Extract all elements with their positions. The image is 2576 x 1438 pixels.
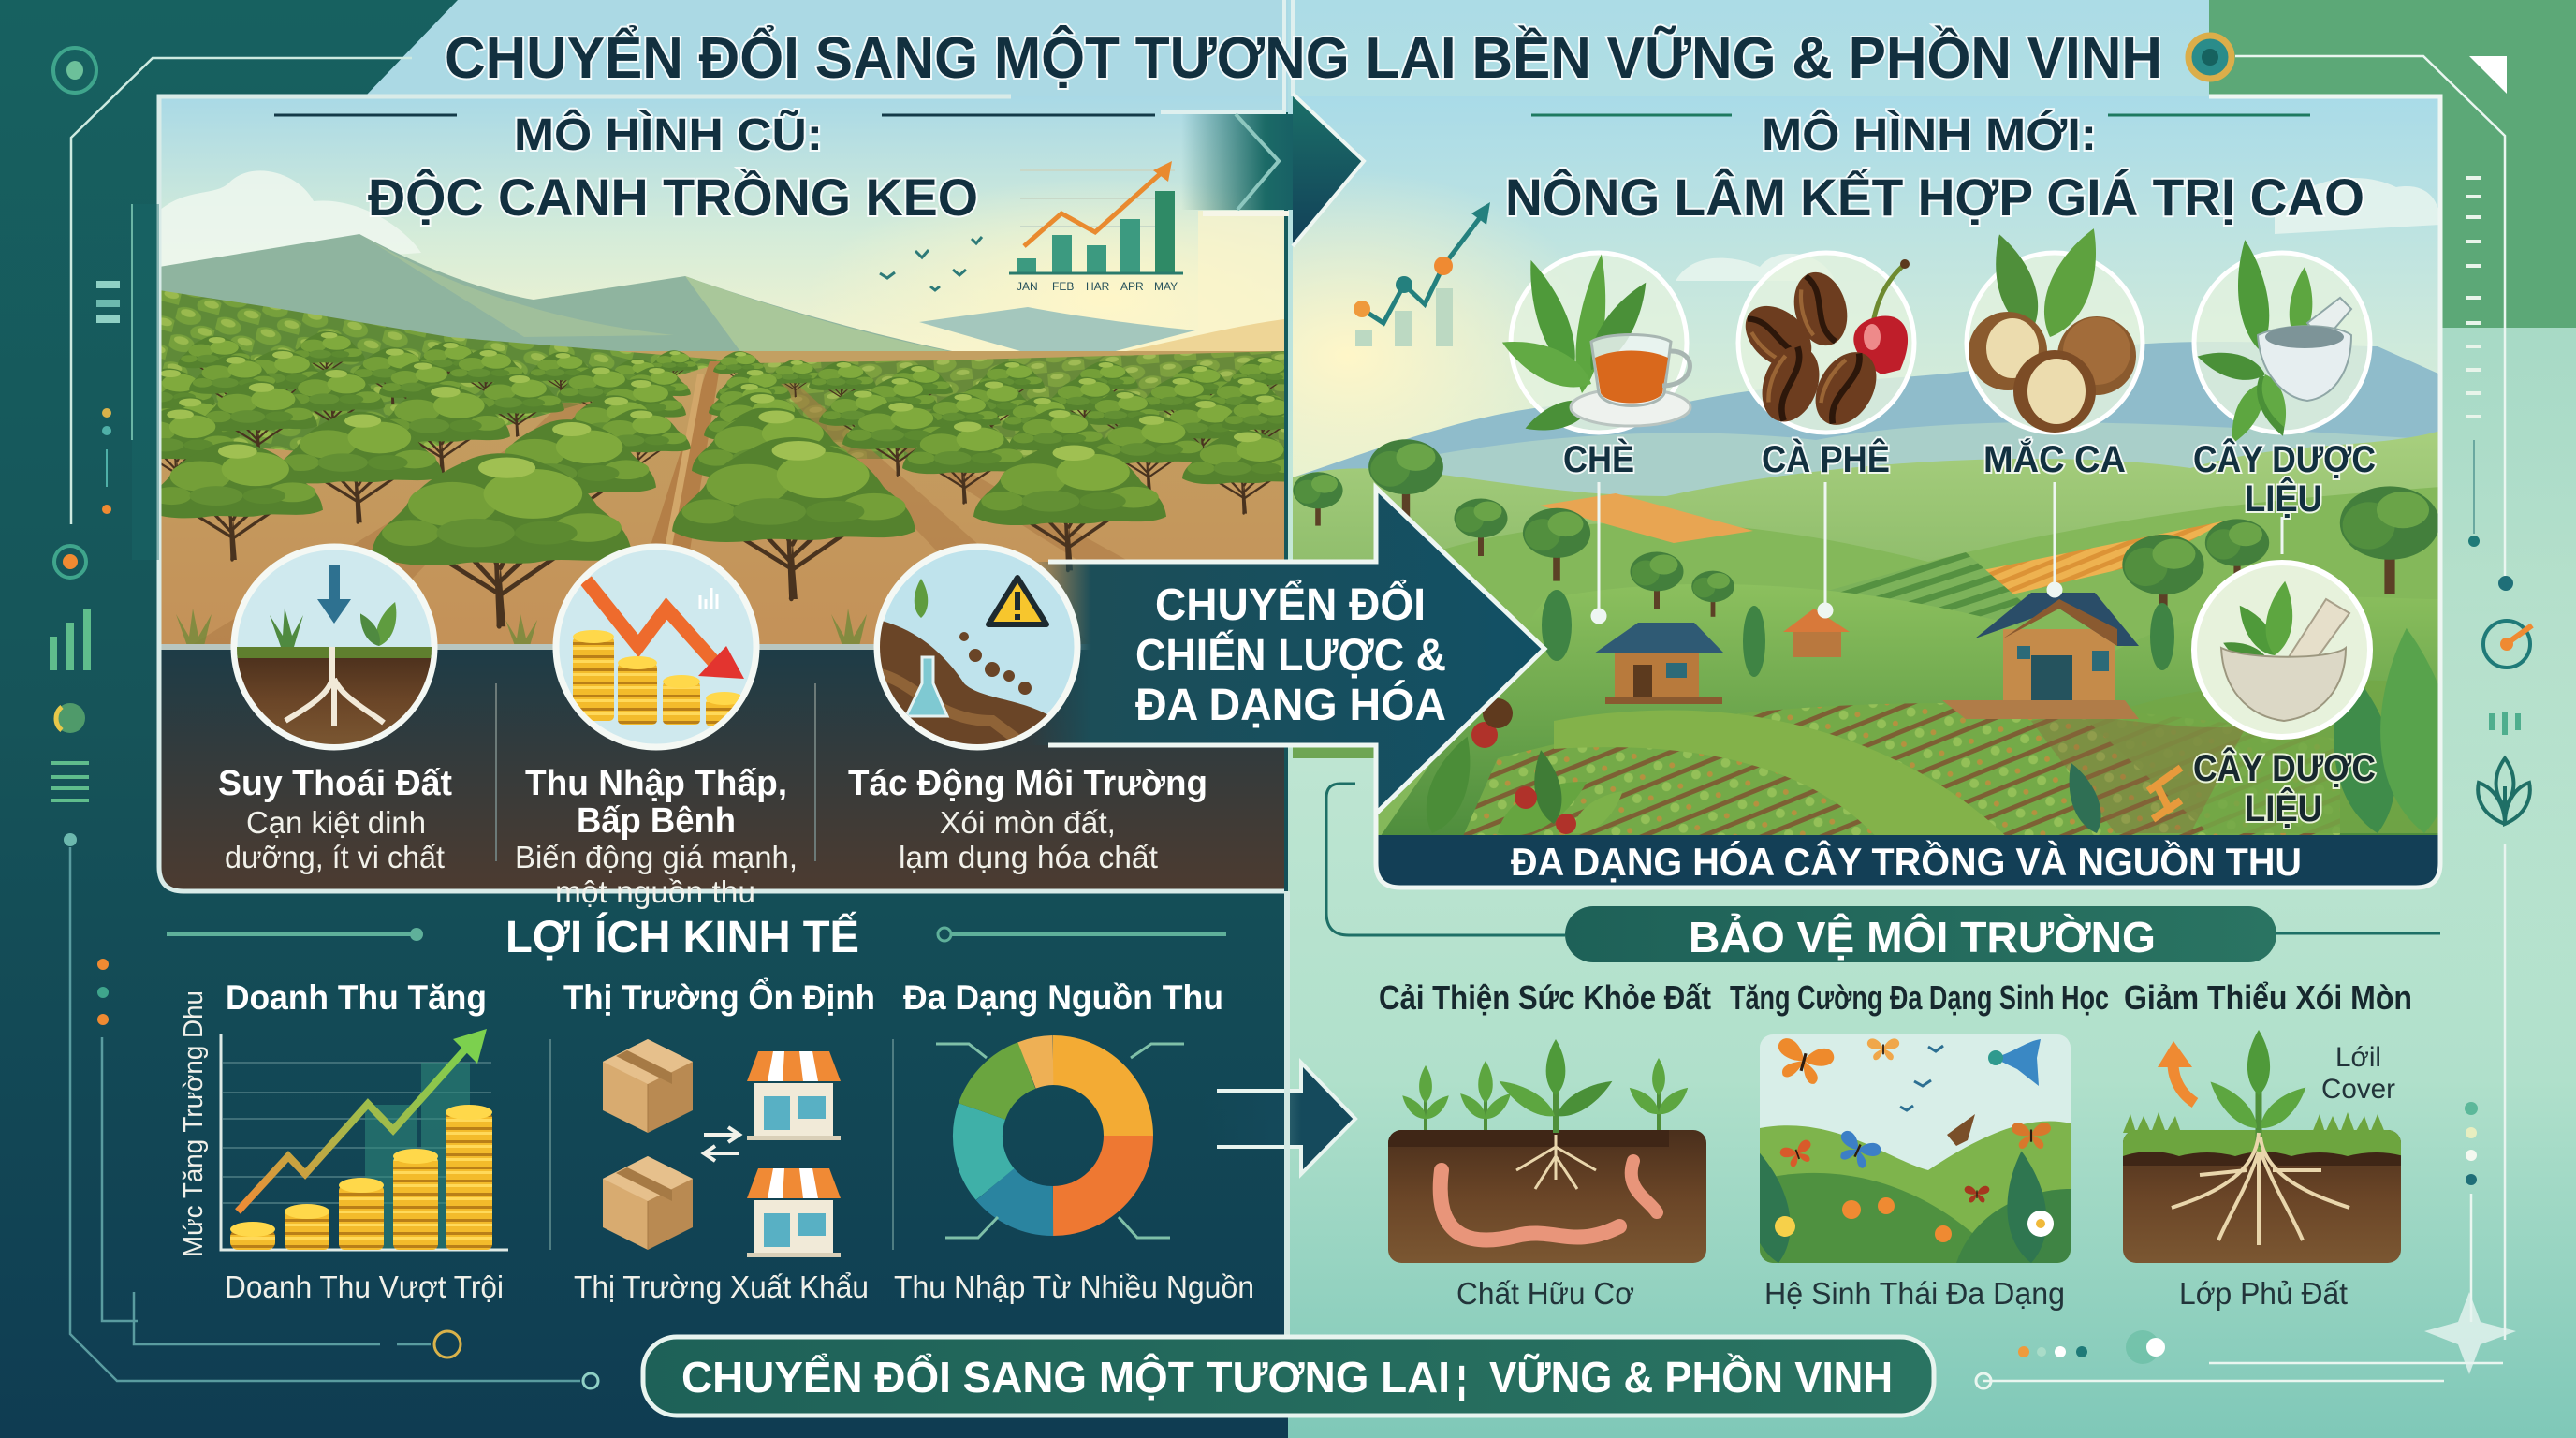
text block: soil degradation: Suy Thoái Đất bbox=[218, 764, 452, 803]
subheadings: benefits: Doanh Thu Tăng bbox=[226, 978, 487, 1017]
pill: closing message: VỮNG & PHỒN VINH bbox=[1489, 1353, 1893, 1401]
banner: diversify crops: ĐA DẠNG HÓA CÂY TRỒNG VÀ NGUỒN THU bbox=[1511, 839, 2302, 884]
crop labels: MẮC CA bbox=[1983, 437, 2126, 480]
birds bbox=[880, 237, 982, 290]
crop label: medicinal herbs repeat: LIỆU bbox=[2245, 786, 2322, 829]
tree rows bbox=[117, 331, 1308, 626]
chart: revenue growth with coins bbox=[179, 990, 508, 1257]
bar chart: monthly growth: JAN bbox=[1017, 280, 1038, 293]
landscape trees bbox=[1293, 439, 2439, 677]
callout lines bbox=[1592, 482, 2282, 623]
pill: closing message: ¦ bbox=[1456, 1359, 1467, 1401]
text block: soil degradation: dưỡng, ít vi chất bbox=[225, 840, 445, 874]
arrow: top transition arrow bbox=[1181, 94, 1364, 246]
caption: market: Thị Trường Xuất Khẩu bbox=[574, 1269, 869, 1304]
arrow label: CHIẾN LƯỢC & bbox=[1135, 630, 1446, 681]
heading: economic benefits: LỢI ÍCH KINH TẾ bbox=[505, 912, 859, 962]
background: left dark half bbox=[0, 0, 1288, 1438]
donut chart: income sources bbox=[936, 1044, 1184, 1238]
icon: soil degradation bbox=[234, 547, 440, 747]
arrow label bbox=[1135, 579, 1446, 730]
icon: falling income bbox=[556, 547, 756, 747]
subheadings: environment: Giảm Thiểu Xói Mòn bbox=[2124, 978, 2412, 1017]
crop labels: CHÈ bbox=[1563, 438, 1634, 480]
decor: title band lower edge bbox=[1161, 0, 1293, 112]
subheadings: environment: Cải Thiện Sức Khỏe Đất bbox=[1379, 978, 1711, 1017]
heading: old model: MÔ HÌNH CŨ: bbox=[514, 109, 823, 160]
bar chart: monthly growth: FEB bbox=[1052, 280, 1074, 293]
text block: soil degradation bbox=[218, 764, 452, 874]
banner: diversify crops bbox=[1378, 835, 2437, 886]
crop: medicinal herbs bbox=[2194, 238, 2370, 448]
crop label: medicinal herbs repeat bbox=[2193, 746, 2376, 829]
arrow: strategic conversion bbox=[1030, 488, 1544, 814]
panel: new model agroforestry scene bbox=[1293, 178, 2437, 886]
text block: environmental impact: lạm dụng hóa chất bbox=[899, 840, 1158, 874]
arrow: benefits to environment bbox=[1198, 1063, 1355, 1174]
caption: organic matter: Chất Hữu Cơ bbox=[1456, 1276, 1634, 1311]
decor: right circuit lines and icons bbox=[1976, 56, 2532, 1388]
pill: environmental protection: BẢO VỆ MÔI TRƯỜNG bbox=[1689, 913, 2156, 961]
heading: new model: MÔ HÌNH MỚI: bbox=[1762, 109, 2097, 160]
foreground leaves and berries bbox=[1415, 625, 2460, 848]
text block: low income: một nguồn thu bbox=[555, 874, 755, 909]
bar chart: monthly growth: MAY bbox=[1154, 280, 1178, 293]
old panel border bbox=[159, 96, 1284, 891]
background: right light half bbox=[1288, 0, 2576, 1438]
text block: low income: Biến động giá mạnh, bbox=[515, 840, 798, 874]
new panel border bbox=[1376, 96, 2440, 888]
icon: title ring bbox=[2188, 36, 2232, 79]
pill: environmental protection bbox=[1326, 784, 2440, 962]
heading: economic benefits bbox=[167, 912, 1226, 962]
illustration: ground cover and erosion control: Cover bbox=[2321, 1074, 2395, 1105]
crop: tea bbox=[1496, 253, 1690, 440]
right lower strip bbox=[2440, 328, 2576, 983]
subheadings: environment: Tăng Cường Đa Dạng Sinh Học bbox=[1730, 978, 2109, 1017]
icon: mortar with herbs bbox=[2194, 563, 2370, 737]
illustration: soil health with worms bbox=[1388, 1039, 1706, 1263]
heading: new model bbox=[1505, 109, 2364, 227]
arrow label: CHUYỂN ĐỔI bbox=[1155, 579, 1426, 630]
heading: old model bbox=[274, 109, 1155, 227]
panel: old model monoculture scene bbox=[161, 96, 1284, 889]
text block: low income bbox=[515, 764, 798, 909]
subheadings: benefits bbox=[226, 976, 1223, 1017]
crop: macadamia bbox=[1967, 221, 2143, 433]
subheadings: benefits: Thị Trường Ổn Định bbox=[564, 976, 875, 1017]
crop labels: CÀ PHÊ bbox=[1762, 437, 1890, 480]
caption: ecosystem: Hệ Sinh Thái Đa Dạng bbox=[1764, 1276, 2065, 1311]
subheadings: benefits: Đa Dạng Nguồn Thu bbox=[903, 978, 1223, 1017]
caption: ground cover: Lớp Phủ Đất bbox=[2179, 1276, 2348, 1311]
illustration: ground cover and erosion control: Lớil bbox=[2335, 1042, 2381, 1073]
text block: low income: Bấp Bênh bbox=[577, 801, 736, 841]
illustration: biodiversity bbox=[1740, 1034, 2071, 1267]
bar chart: monthly growth: APR bbox=[1120, 280, 1144, 293]
icons: export boxes and shops bbox=[603, 1039, 841, 1257]
text block: environmental impact: Xói mòn đất, bbox=[940, 805, 1116, 840]
crop: coffee bbox=[1734, 253, 1914, 435]
pill: closing message bbox=[643, 1337, 1934, 1416]
heading: old model: ĐỘC CANH TRỒNG KEO bbox=[368, 168, 978, 227]
text block: low income: Thu Nhập Thấp, bbox=[525, 764, 787, 803]
crop labels: CÂY DƯỢC bbox=[2193, 437, 2376, 480]
crop label: medicinal herbs repeat: CÂY DƯỢC bbox=[2193, 746, 2376, 789]
crop labels bbox=[1563, 437, 2376, 520]
text block: soil degradation: Cạn kiệt dinh bbox=[246, 805, 426, 840]
line chart: new model growth bbox=[1354, 202, 1490, 346]
caption: income: Thu Nhập Từ Nhiều Nguồn bbox=[894, 1269, 1254, 1304]
title band bbox=[365, 0, 1288, 112]
chart: revenue growth with coins: Mức Tăng Trường Dhu bbox=[179, 990, 209, 1257]
text block: environmental impact: Tác Động Môi Trường bbox=[848, 764, 1208, 803]
decor: left circuit lines and icons bbox=[51, 48, 598, 1388]
title: CHUYỂN ĐỔI SANG MỘT TƯƠNG LAI BỀN VỮNG & PHỒN VINH bbox=[445, 25, 2162, 91]
bar chart: monthly growth bbox=[1009, 161, 1183, 293]
heading: new model: NÔNG LÂM KẾT HỢP GIÁ TRỊ CAO bbox=[1505, 168, 2364, 227]
illustration: ground cover and erosion control bbox=[2123, 1030, 2404, 1263]
crop labels: LIỆU bbox=[2245, 477, 2322, 520]
pill: closing message: CHUYỂN ĐỔI SANG MỘT TƯƠNG LAI bbox=[681, 1353, 1450, 1401]
icon: environmental impact bbox=[871, 547, 1077, 749]
right corner green block bbox=[2209, 0, 2576, 328]
caption: revenue: Doanh Thu Vượt Trội bbox=[225, 1269, 504, 1304]
farm houses bbox=[1594, 593, 2139, 719]
arrow label: ĐA DẠNG HÓA bbox=[1135, 679, 1446, 730]
band: problems bbox=[159, 648, 1284, 893]
bar chart: monthly growth: HAR bbox=[1086, 280, 1110, 293]
text block: environmental impact bbox=[848, 764, 1208, 874]
subheadings: environment bbox=[1379, 978, 2412, 1017]
